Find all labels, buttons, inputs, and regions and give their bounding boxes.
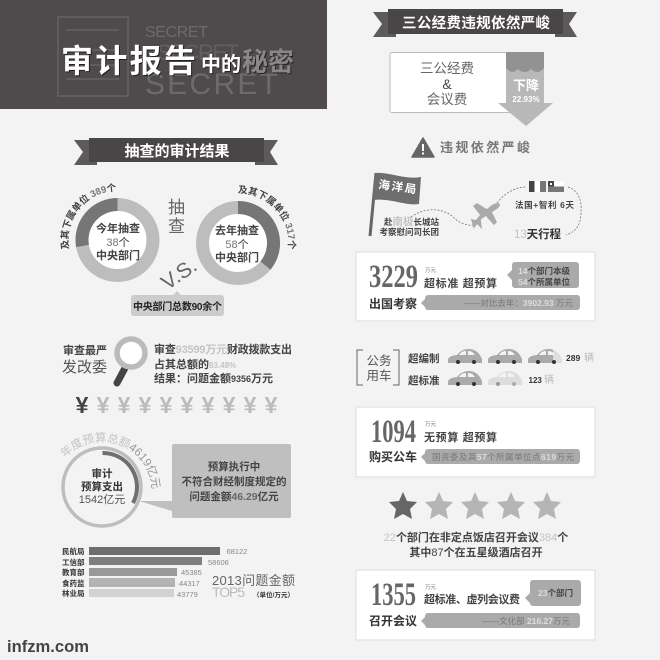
yen row: ¥ (118, 392, 131, 418)
box: expenses decline: 会议费 (427, 92, 467, 107)
panel: meetings: 1355 (371, 577, 416, 613)
panel: overseas trips: 超标准 超预算 (424, 276, 497, 290)
title: 中的 (201, 53, 241, 76)
car row: over standard (448, 371, 522, 386)
SECRET watermark (145, 24, 278, 101)
title: 秘密 (242, 47, 294, 77)
bar chart: top 5: 44317 (179, 579, 200, 588)
yen row: ¥ (76, 392, 89, 418)
bar chart: top 5: 林业局 (62, 588, 84, 598)
curved label: 389 units: 及其下属单位 389个 (60, 183, 116, 249)
panel: overseas trips: 出国考察 (369, 296, 417, 311)
official cars section: 超编制 (408, 352, 440, 365)
bar chart: top 5: 43779 (177, 590, 198, 599)
yen row (76, 392, 278, 418)
official cars section (357, 349, 594, 387)
route text: Antarctica: 赴南极长城站 (384, 215, 439, 228)
bar chart: top 5: 工信部 (62, 557, 85, 567)
route text: 13 days: 13天行程 (514, 227, 562, 241)
callout: problem amount: 不符合财经制度规定的 (182, 475, 286, 488)
panel: car purchase: 万元 (425, 421, 437, 428)
versus label: V.S. (157, 254, 201, 295)
panel: car purchase (356, 407, 595, 477)
callout: problem amount (139, 444, 291, 518)
budget gauge: 1542亿元 (79, 493, 125, 506)
flag: oceanic administration: 海洋局 (378, 177, 417, 196)
ribbon heading: audit results: 抽查的审计结果 (124, 142, 230, 160)
bracket label: 用车 (366, 368, 392, 383)
title (61, 43, 294, 79)
curved label: annual budget: 年度预算总额4619亿元 (60, 432, 161, 488)
donut: last year: 中央部门 (215, 250, 259, 264)
box: expenses decline (390, 52, 553, 126)
panel: overseas trips (356, 252, 595, 321)
panel: overseas trips: 3229 (369, 259, 418, 295)
ribbon heading: three public expenses: 三公经费违规依然严峻 (402, 14, 550, 32)
chart title: （单位/万元） (253, 590, 294, 599)
bracket label (357, 350, 399, 385)
ribbon heading: three public expenses (373, 9, 577, 37)
car row: over quota (448, 349, 562, 364)
pill: culture ministry (421, 613, 580, 628)
donut: last year: 58个 (225, 238, 249, 251)
pill: comparison: ——对比去年：3902.93 万元 (463, 298, 573, 308)
panel: car purchase: 购买公车 (369, 449, 417, 464)
yen row: ¥ (181, 392, 194, 418)
budget gauge: 审计 (92, 467, 113, 480)
panel: car purchase: 无预算 超预算 (424, 430, 497, 444)
vertical label: spot check: 抽 (168, 198, 185, 217)
donut: this year (82, 204, 153, 276)
panel: meetings: 超标准、虚列会议费 (424, 592, 520, 606)
panel: car purchase: 1094 (371, 414, 416, 450)
official cars section: 辆 (544, 373, 554, 386)
callout: problem amount: 预算执行中 (208, 460, 260, 473)
pill: total departments (131, 291, 224, 316)
callout: departments: 54个所属单位 (518, 277, 570, 287)
panel: meetings: 召开会议 (369, 613, 417, 628)
bar chart: top 5: 食药监 (62, 578, 85, 588)
yen row: ¥ (265, 392, 278, 418)
route text: Antarctica (379, 215, 439, 237)
arrow: decline (498, 52, 553, 126)
vertical label: spot check: 查 (168, 217, 185, 236)
flag: oceanic administration (370, 173, 421, 236)
arrow: decline: 22.93% (512, 95, 540, 104)
official cars section: 辆 (584, 351, 594, 364)
chart title (212, 573, 295, 600)
pill: comparison (421, 295, 580, 310)
yen row: ¥ (139, 392, 152, 418)
NDRC section: 审查93599万元财政拨款支出 (154, 342, 292, 356)
curved label: 317 units: 及其下属单位 317 个 (238, 185, 296, 250)
callout: departments (507, 262, 579, 288)
panel: overseas trips: 万元 (425, 267, 437, 274)
icon: document (58, 17, 128, 96)
SECRET watermark: SECRET (145, 24, 208, 41)
icon: plane (472, 204, 499, 227)
budget gauge: 预算支出 (81, 480, 123, 493)
budget gauge (63, 448, 141, 526)
meeting text: 其中87个在五星级酒店召开 (409, 545, 543, 559)
donut: this year: 今年抽查 (96, 221, 140, 235)
yen row: ¥ (160, 392, 173, 418)
ribbon heading: audit results (74, 138, 278, 165)
dashed route (411, 187, 581, 235)
source logo: infzm.com (7, 638, 89, 656)
NDRC section: 占其总额的83.48% (154, 357, 236, 371)
route text: Antarctica: 考察慰问司长团 (379, 227, 439, 237)
official cars section: 123 (528, 376, 542, 385)
warning heading (412, 138, 530, 157)
box: expenses decline: 三公经费 (420, 61, 474, 76)
donut: last year (202, 207, 274, 278)
route text: France and Chile: 法国+智利 6天 (515, 200, 574, 210)
vertical label: spot check (168, 198, 185, 236)
panel: meetings (356, 570, 595, 640)
bar chart: top 5: 58606 (208, 558, 229, 567)
pill: total departments: 中央部门总数90余个 (133, 300, 222, 313)
meeting text (384, 530, 568, 559)
donut: last year: 去年抽查 (215, 223, 259, 237)
donut: this year: 中央部门 (96, 248, 140, 262)
SECRET watermark: SECRET (145, 68, 278, 101)
NDRC section: 发改委 (62, 359, 107, 376)
chart title: 2013问题金额 (212, 573, 295, 588)
callout: 23 departments (525, 580, 581, 606)
panel: meetings: 万元 (425, 584, 437, 591)
bar chart: top 5: 民航局 (62, 546, 84, 556)
chart title: TOP5 (212, 584, 245, 600)
pill: culture ministry: ——文化部 216.27万元 (482, 616, 570, 626)
pill: SASAC note: 国资委及其57个所属单位点619万元 (432, 452, 574, 462)
callout: 23 departments: 23个部门 (538, 588, 573, 598)
official cars section: 289 (566, 353, 580, 363)
pill: SASAC note (421, 449, 580, 464)
title: 审计报告 (61, 43, 196, 79)
NDRC section: 结果：问题金额9356万元 (154, 371, 273, 385)
NDRC section (62, 339, 292, 385)
star row (389, 492, 561, 519)
SECRET watermark: SECRET (157, 40, 239, 65)
header banner (0, 0, 327, 109)
donut: this year: 38个 (106, 236, 130, 249)
icon: magnifier (117, 339, 145, 383)
meeting text: 22个部门在非定点饭店召开会议384个 (384, 530, 568, 544)
NDRC section: 审查最严 (63, 343, 107, 357)
official cars section: 超标准 (408, 374, 440, 387)
bar chart: top 5 (62, 546, 247, 599)
callout: problem amount: 问题金额46.29亿元 (189, 490, 279, 503)
arrow: decline: 下降 (513, 78, 539, 93)
yen row: ¥ (244, 392, 257, 418)
bracket label: 公务 (366, 353, 392, 368)
bar chart: top 5: 45385 (181, 568, 202, 577)
yen row: ¥ (202, 392, 215, 418)
bar chart: top 5: 68122 (226, 547, 247, 556)
box: expenses decline: & (442, 76, 452, 92)
warning heading: 违规依然严峻 (440, 140, 530, 155)
yen row: ¥ (97, 392, 110, 418)
bar chart: top 5: 教育部 (62, 567, 85, 577)
yen row: ¥ (223, 392, 236, 418)
callout: departments: 14个部门本级 (518, 266, 570, 276)
icon: country flags (529, 181, 564, 192)
